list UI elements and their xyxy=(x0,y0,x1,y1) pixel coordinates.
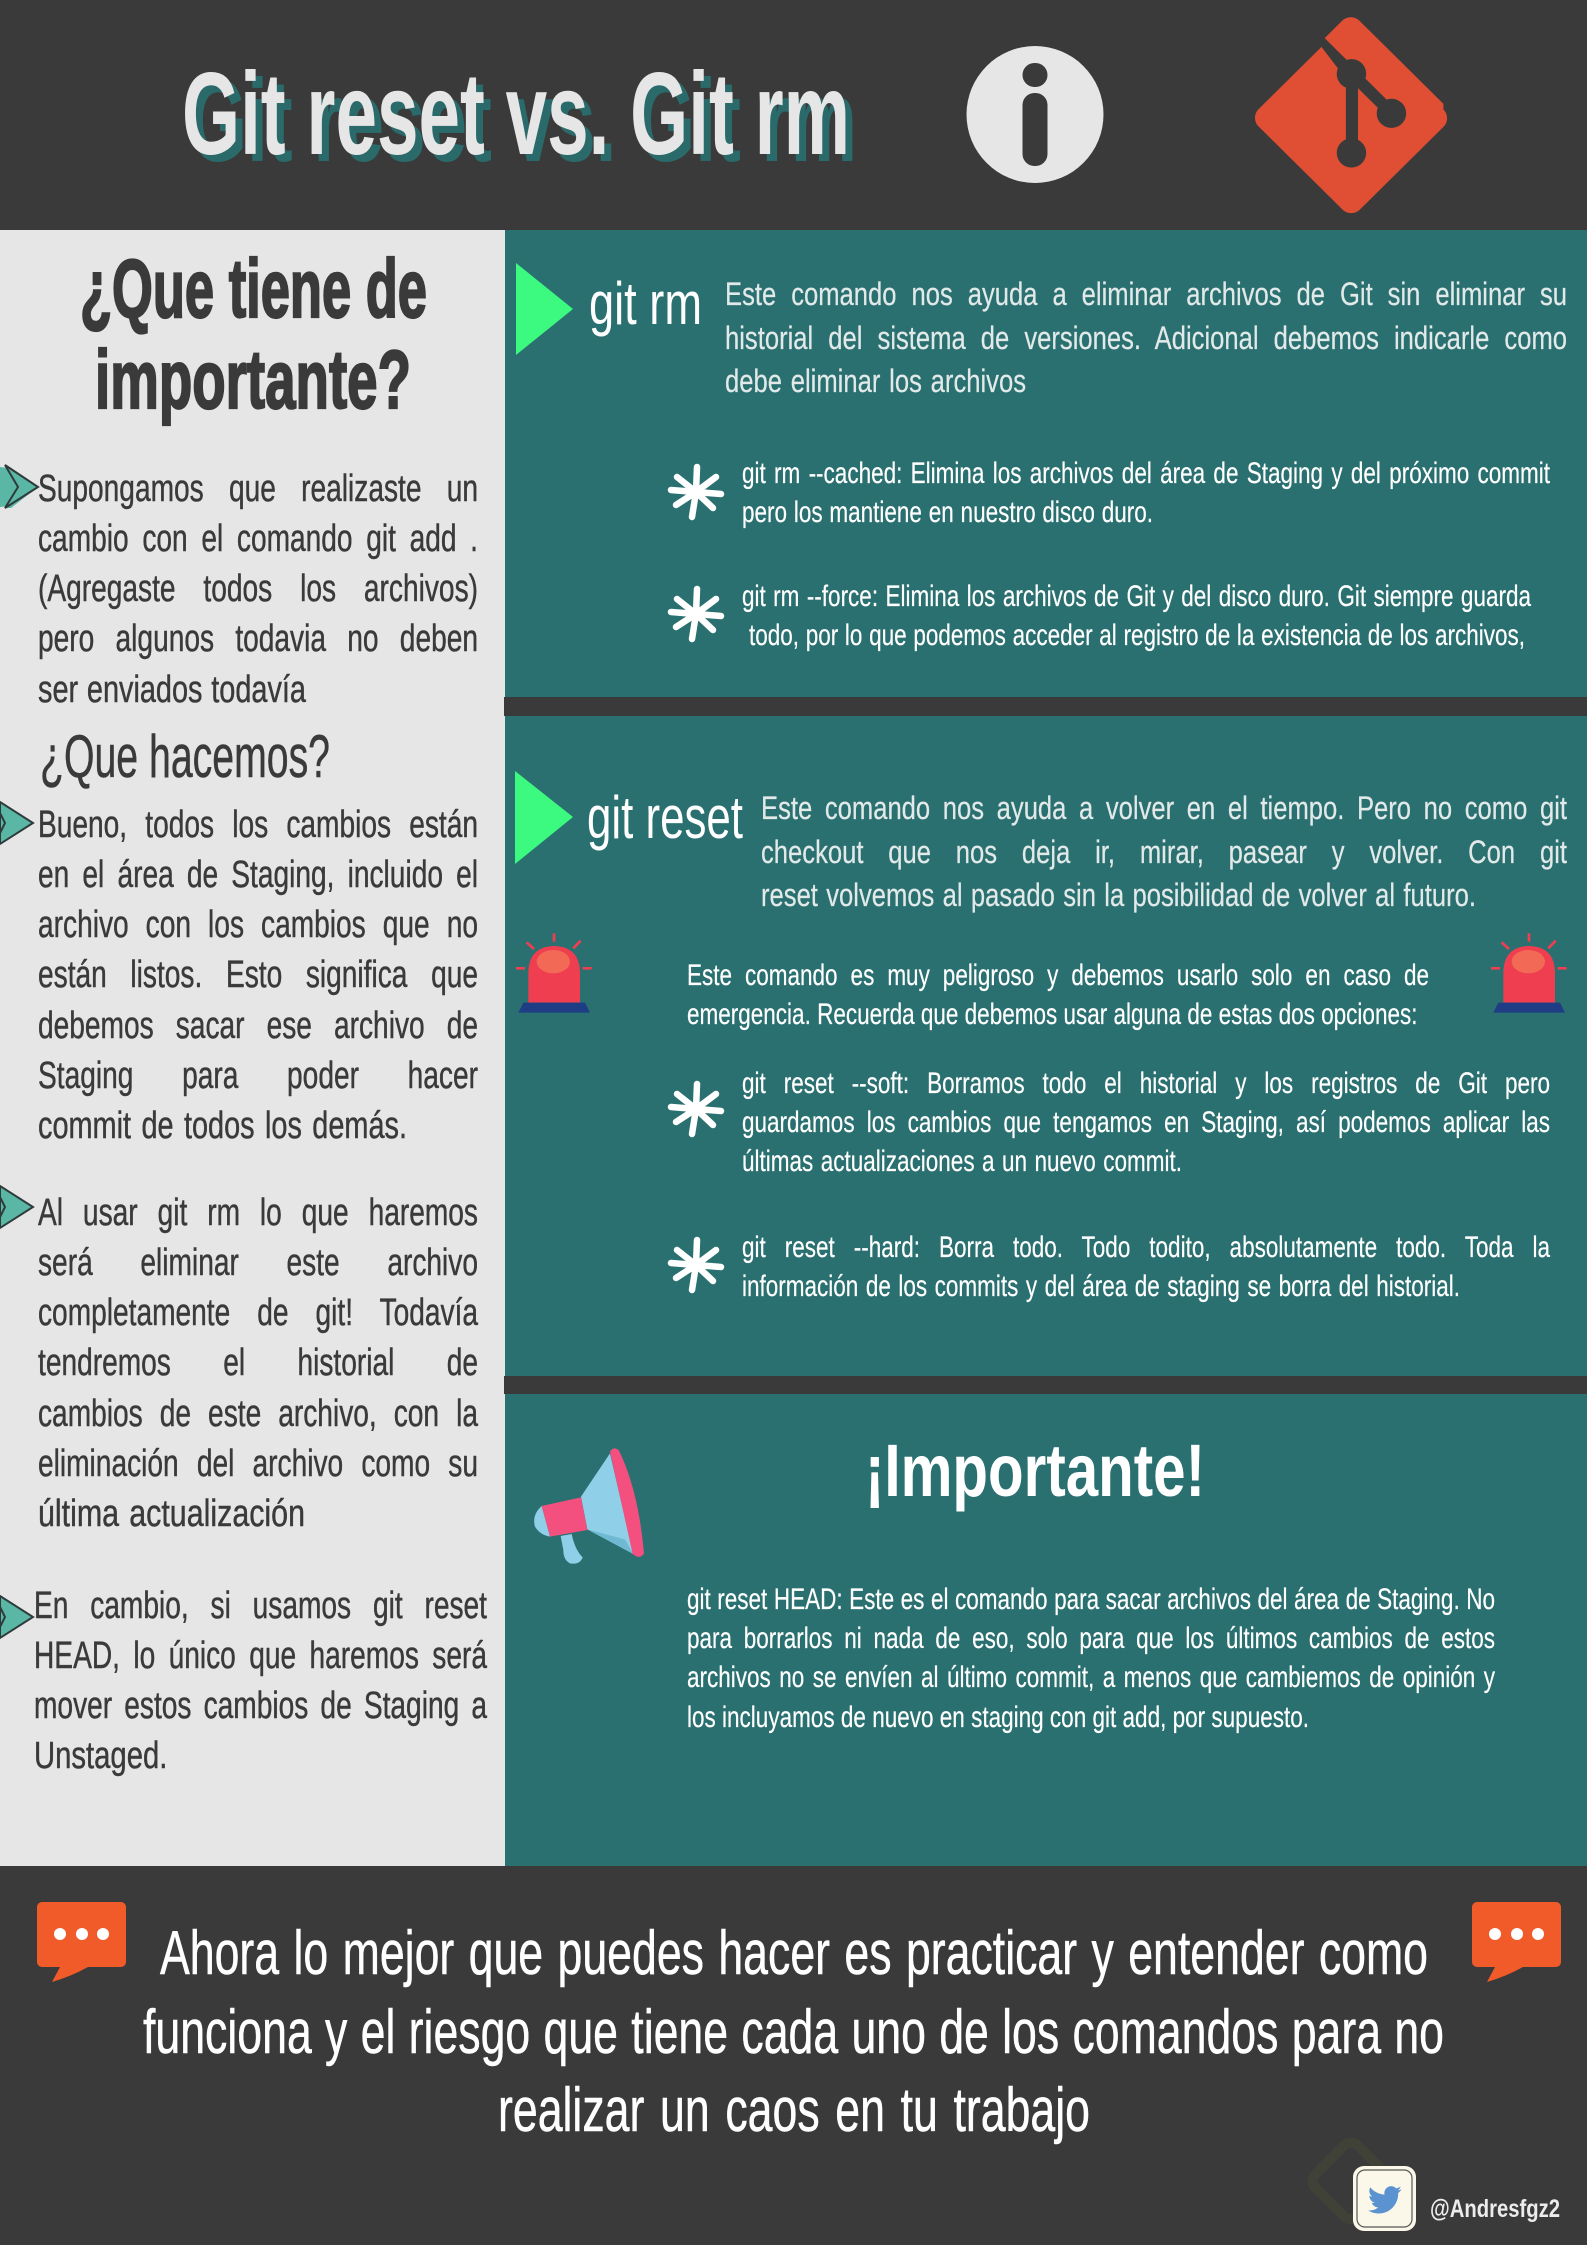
footer message xyxy=(143,1919,1444,2145)
text block: supongamos xyxy=(38,468,478,711)
icon: asterisk cached xyxy=(671,467,721,517)
text block: git reset soft: últimas actualizaciones a un nuevo commit. xyxy=(742,1145,1182,1178)
text block: supongamos: pero algunos todavia no deben xyxy=(38,618,478,660)
text block: git rm description: debe eliminar los archivos xyxy=(725,363,1026,399)
text block: git rm cached: git rm --cached: Elimina los archivos del área de Staging y del próximo commit xyxy=(742,457,1550,490)
heading: git rm: git rm xyxy=(589,270,702,337)
title: Git reset vs. Git rm xyxy=(182,48,850,179)
text block: git reset description: checkout que nos deja ir, mirar, pasear y volver. Con git xyxy=(761,834,1567,870)
icon: asterisk soft xyxy=(671,1084,721,1134)
footer message: Ahora lo mejor que puedes hacer es practicar y entender como xyxy=(160,1919,1428,1988)
text block: bueno: en el área de Staging, incluido el xyxy=(38,854,478,896)
watermark diamond xyxy=(1309,2139,1393,2223)
text block: git rm force xyxy=(742,580,1532,652)
text block: git rm cached: pero los mantiene en nuestro disco duro. xyxy=(742,496,1153,529)
text block: al usar git rm: cambios de este archivo, con la xyxy=(38,1393,478,1435)
icon: twitter badge xyxy=(1353,2166,1416,2231)
text block: al usar git rm: última actualización xyxy=(38,1493,305,1535)
icon: arrow bullet 3 xyxy=(0,1186,33,1228)
heading: que tiene de importante: importante? xyxy=(95,333,411,426)
text block: git rm description: historial del sistema de versiones. Adicional debemos indicarle como xyxy=(725,320,1567,356)
text block: bueno: archivo con los cambios que no xyxy=(38,904,478,946)
text block: supongamos: (Agregaste todos los archivos) xyxy=(38,568,478,610)
icon: info xyxy=(966,46,1104,183)
icon: arrow bullet 4 xyxy=(0,1596,33,1638)
heading: importante: ¡Importante! xyxy=(865,1429,1205,1512)
icon: green triangle git rm xyxy=(516,263,573,355)
panel: left column xyxy=(0,230,505,1866)
text block: git reset soft: guardamos los cambios que tengamos en Staging, así podemos aplicar las xyxy=(742,1106,1550,1139)
icon: asterisk force xyxy=(671,589,721,639)
footer message: realizar un caos en tu trabajo xyxy=(498,2076,1090,2145)
text block: warning: emergencia. Recuerda que debemos usar alguna de estas dos opciones: xyxy=(687,998,1417,1031)
text block: bueno: Staging para poder hacer xyxy=(38,1055,478,1097)
text block: git rm force: todo, por lo que podemos acceder al registro de la existencia de los archivos, xyxy=(749,619,1525,652)
icon: speech bubble right xyxy=(1472,1902,1561,1982)
text block: en cambio: HEAD, lo único que haremos será xyxy=(34,1635,487,1677)
text block: bueno: commit de todos los demás. xyxy=(38,1105,407,1147)
text block: git rm force: git rm --force: Elimina los archivos de Git y del disco duro. Git siempre guarda xyxy=(742,580,1531,613)
heading: que tiene de importante xyxy=(80,242,427,426)
text block: al usar git rm: completamente de git! Todavía xyxy=(38,1292,478,1334)
text block: git reset hard xyxy=(742,1230,1550,1303)
text block: git rm description: Este comando nos ayuda a eliminar archivos de Git sin eliminar su xyxy=(725,276,1567,312)
icon: green triangle git reset xyxy=(515,771,573,864)
icon: arrow bullet 1 xyxy=(0,465,38,508)
text block: warning: Este comando es muy peligroso y debemos usarlo solo en caso de xyxy=(687,959,1429,992)
text block: git reset hard: información de los commits y del área de staging se borra del historial. xyxy=(742,1270,1460,1303)
icon: asterisk hard xyxy=(671,1240,721,1290)
text block: en cambio: Unstaged. xyxy=(34,1735,167,1777)
panel: header band xyxy=(0,0,1587,230)
footer message: funciona y el riesgo que tiene cada uno de los comandos para no xyxy=(143,1998,1444,2067)
icon: git logo xyxy=(1255,17,1447,213)
twitter handle: @Andresfgz2 xyxy=(1430,2195,1560,2223)
text block: al usar git rm: Al usar git rm lo que haremos xyxy=(38,1192,478,1234)
text block: git rm description xyxy=(725,276,1567,399)
panel: footer band xyxy=(0,1866,1587,2245)
text block: bueno xyxy=(38,804,478,1147)
icon: speech bubble left xyxy=(37,1902,126,1982)
text block: git reset description: Este comando nos ayuda a volver en el tiempo. Pero no como git xyxy=(761,790,1567,826)
text block: en cambio: mover estos cambios de Staging a xyxy=(34,1685,487,1727)
text block: bueno: Bueno, todos los cambios están xyxy=(38,804,478,846)
text block: bueno: están listos. Esto significa que xyxy=(38,954,478,996)
heading: que tiene de importante: ¿Que tiene de xyxy=(80,242,427,335)
icon: megaphone xyxy=(534,1448,644,1564)
text block: supongamos: Supongamos que realizaste un xyxy=(38,468,478,510)
text block: git reset head: los incluyamos de nuevo en staging con git add, por supuesto. xyxy=(687,1701,1309,1734)
text block: git rm cached xyxy=(742,457,1550,529)
text block: git reset head: archivos no se envíen al último commit, a menos que cambiemos de opinión y xyxy=(687,1661,1495,1694)
text block: al usar git rm: será eliminar este archivo xyxy=(38,1242,478,1284)
text block: al usar git rm xyxy=(38,1192,478,1535)
text block: warning xyxy=(687,959,1429,1031)
text block: bueno: debemos sacar ese archivo de xyxy=(38,1005,478,1047)
text block: supongamos: ser enviados todavía xyxy=(38,669,306,711)
text block: en cambio xyxy=(34,1585,488,1777)
icon: siren left xyxy=(516,933,592,1013)
icon: arrow bullet 2 xyxy=(0,802,33,844)
text block: en cambio: En cambio, si usamos git reset xyxy=(34,1585,487,1627)
text block: al usar git rm: eliminación del archivo como su xyxy=(38,1443,478,1485)
text block: git reset hard: git reset --hard: Borra todo. Todo todito, absolutamente todo. Toda la xyxy=(742,1230,1550,1264)
text block: git reset description xyxy=(761,790,1567,913)
text block: git reset description: reset volvemos al pasado sin la posibilidad de volver al futuro. xyxy=(761,877,1476,913)
text block: git reset soft: git reset --soft: Borramos todo el historial y los registros de Git pero xyxy=(742,1067,1550,1100)
heading: que hacemos: ¿Que hacemos? xyxy=(40,723,330,790)
text block: supongamos: cambio con el comando git add . xyxy=(38,518,478,560)
icon: siren right xyxy=(1491,933,1567,1013)
text block: git reset soft xyxy=(742,1067,1550,1178)
text block: git reset head xyxy=(687,1583,1495,1734)
panel: right column xyxy=(505,230,1587,1866)
text block: git reset head: para borrarlos ni nada de eso, solo para que los últimos cambios de estos xyxy=(687,1622,1495,1655)
text block: git reset head: git reset HEAD: Este es el comando para sacar archivos del área de Staging. No xyxy=(687,1583,1495,1616)
heading: git reset: git reset xyxy=(587,784,743,851)
text block: al usar git rm: tendremos el historial de xyxy=(38,1342,478,1384)
